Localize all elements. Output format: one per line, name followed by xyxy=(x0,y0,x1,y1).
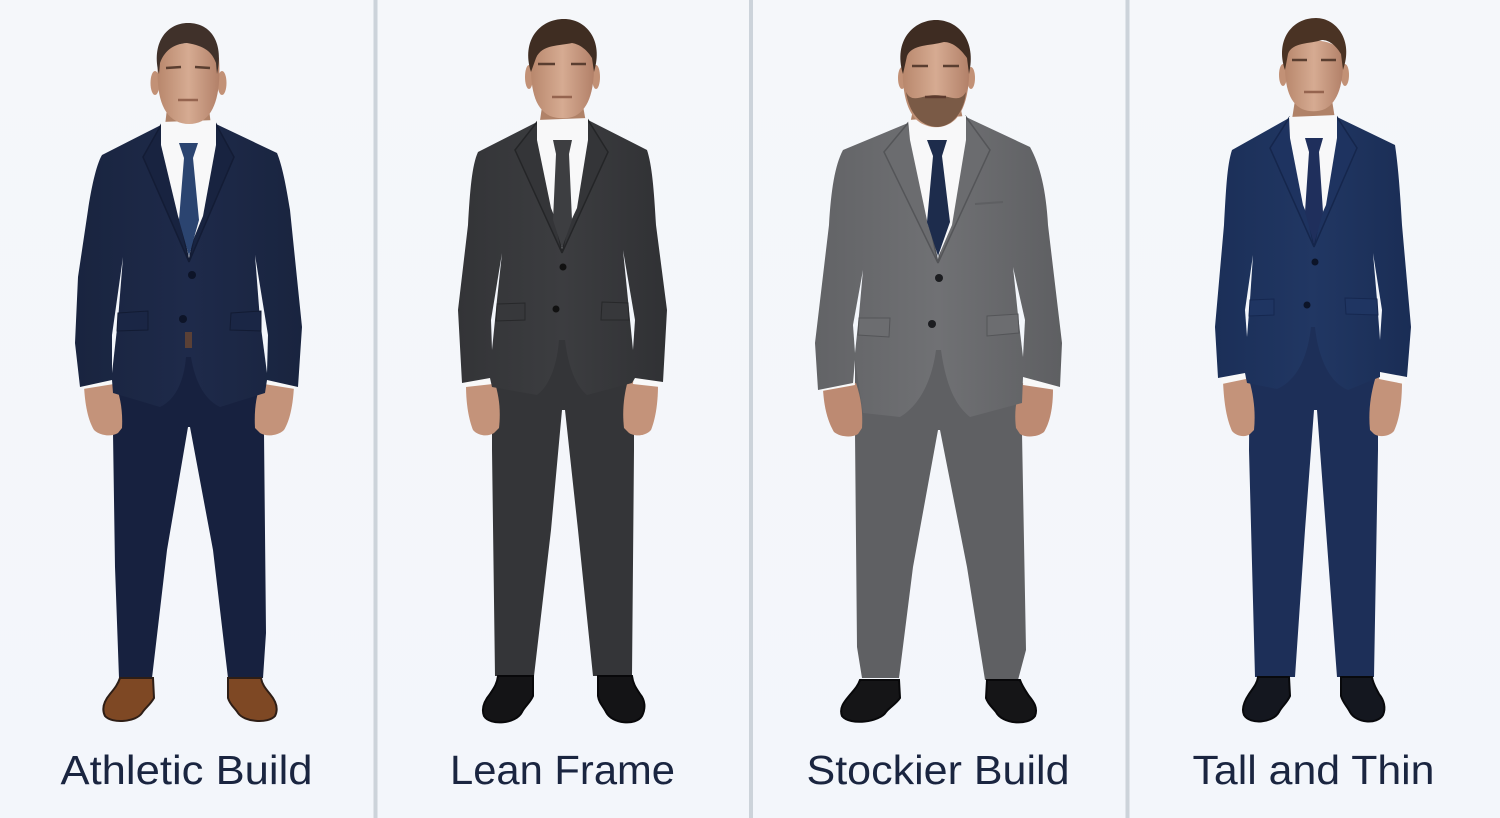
figure: tall thin man in blue suit with black shoes xyxy=(1215,18,1411,721)
panel: lean frame xyxy=(450,19,675,793)
hands xyxy=(1223,376,1402,436)
jacket xyxy=(815,117,1062,417)
panel: athletic build xyxy=(60,23,312,793)
hands xyxy=(84,380,294,435)
jacket xyxy=(458,120,667,395)
lapels xyxy=(515,120,608,253)
neck xyxy=(908,105,966,134)
panel: tall and thin xyxy=(1192,18,1434,793)
lapels xyxy=(1270,117,1357,247)
face xyxy=(158,43,219,124)
facial features xyxy=(1292,60,1336,92)
shirt and collar xyxy=(537,118,588,238)
facial features xyxy=(538,64,586,97)
label: athletic build: Athletic Build xyxy=(60,747,312,793)
shirt cuffs xyxy=(81,375,296,389)
neck xyxy=(1290,100,1337,132)
arm gaps xyxy=(853,267,1025,357)
hair xyxy=(528,19,597,72)
necktie xyxy=(927,140,950,256)
jacket buttons xyxy=(1304,258,1318,308)
head xyxy=(898,20,975,127)
hands xyxy=(823,383,1053,436)
ears xyxy=(525,65,533,89)
trousers xyxy=(855,340,1026,680)
lapels xyxy=(884,117,990,263)
trousers xyxy=(492,325,634,676)
belt xyxy=(185,332,192,348)
necktie xyxy=(1305,138,1323,244)
trousers xyxy=(113,335,266,678)
shirt cuffs xyxy=(464,373,661,387)
hair xyxy=(1282,18,1346,70)
jacket buttons xyxy=(928,274,943,328)
label: tall and thin: Tall and Thin xyxy=(1192,747,1434,793)
shirt and collar xyxy=(161,120,216,250)
face xyxy=(903,40,969,127)
black shoes xyxy=(483,676,644,722)
ears xyxy=(898,67,906,89)
black shoes xyxy=(1243,677,1384,721)
facial features xyxy=(912,66,959,97)
divider: lean and stockier xyxy=(749,0,753,818)
black shoes xyxy=(841,680,1036,722)
divider: stockier and tall xyxy=(1126,0,1130,818)
jacket xyxy=(75,124,302,407)
pocket flaps xyxy=(858,314,1019,337)
jacket buttons xyxy=(552,264,566,312)
neck xyxy=(164,100,212,134)
pocket flaps xyxy=(1249,298,1378,316)
chest pocket xyxy=(975,202,1003,204)
head xyxy=(1279,18,1349,111)
face xyxy=(531,41,594,118)
figure: stockier man in grey suit with black shoes xyxy=(815,20,1062,722)
ears xyxy=(150,71,160,95)
shirt and collar xyxy=(1289,115,1337,232)
label: stockier build: Stockier Build xyxy=(806,747,1070,793)
brown shoes xyxy=(103,678,277,721)
ears xyxy=(1279,64,1287,86)
pocket flaps xyxy=(117,311,261,331)
figure: athletic man in navy suit with brown shoes xyxy=(75,23,302,721)
hands xyxy=(466,380,658,435)
hair xyxy=(900,20,971,74)
face xyxy=(1285,40,1343,111)
jacket xyxy=(1215,117,1411,390)
facial features xyxy=(166,67,210,100)
shirt cuffs xyxy=(1220,368,1406,384)
lapels xyxy=(143,124,234,262)
arm gaps xyxy=(491,250,635,350)
neck xyxy=(538,100,588,134)
shirt cuffs xyxy=(820,375,1058,391)
label: lean frame: Lean Frame xyxy=(450,747,675,793)
hair xyxy=(157,23,219,74)
jacket buttons xyxy=(179,271,196,323)
head xyxy=(525,19,600,118)
head xyxy=(150,23,226,124)
arm gaps xyxy=(1245,253,1382,340)
necktie xyxy=(179,143,199,256)
beard xyxy=(906,92,966,127)
figure: lean man in charcoal suit with black shoes xyxy=(458,19,667,722)
arm gaps xyxy=(112,255,268,373)
necktie xyxy=(553,140,572,248)
trousers xyxy=(1249,320,1378,677)
panel: stockier build xyxy=(806,20,1070,793)
divider: athletic and lean xyxy=(374,0,378,818)
pocket flaps xyxy=(496,302,629,321)
shirt and collar xyxy=(908,116,966,255)
